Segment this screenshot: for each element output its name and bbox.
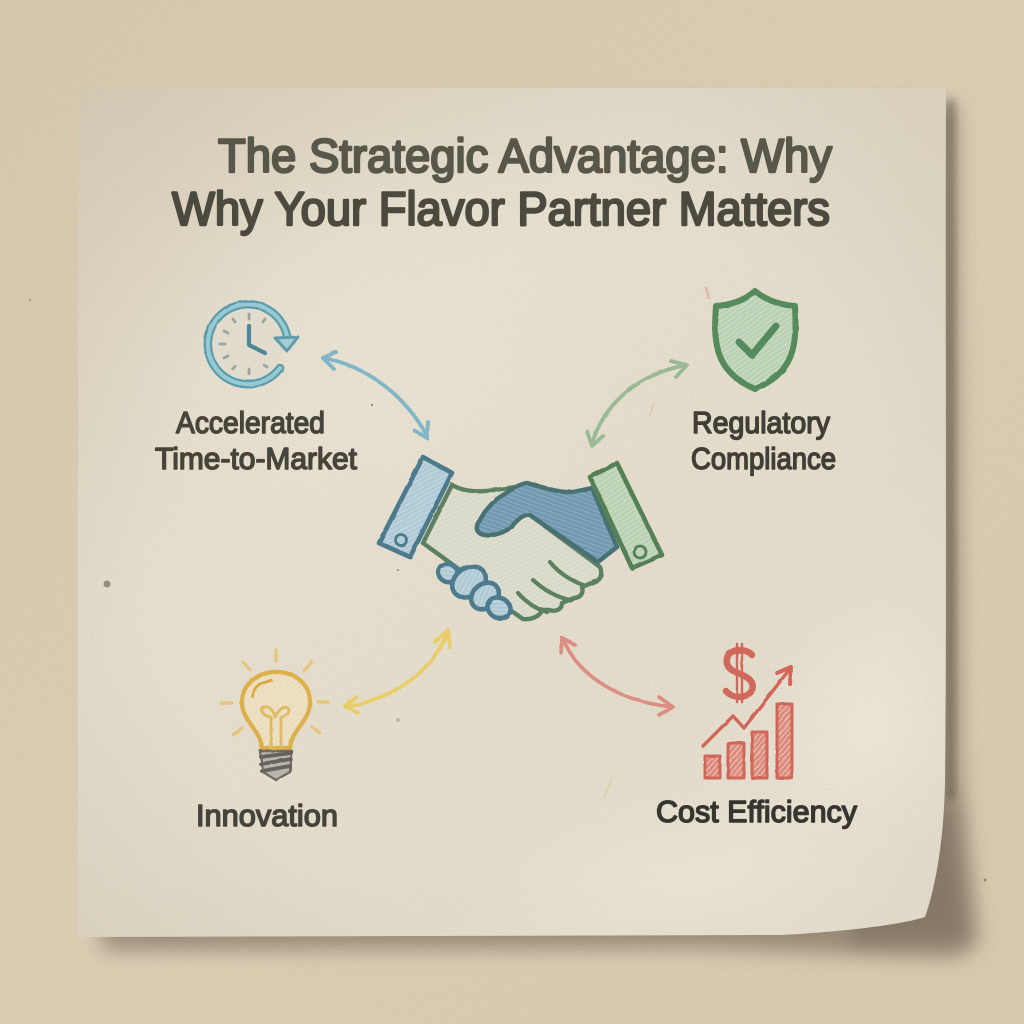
right cuff: [590, 463, 662, 568]
title: [172, 129, 832, 235]
icon: clock with circular arrow: [208, 304, 298, 384]
blue fingers: [435, 560, 514, 623]
icon: handshake: [379, 457, 662, 623]
bars: [705, 704, 792, 778]
label: Accelerated Time-to-Market: Accelerated: [176, 405, 325, 440]
arrow: handshake to cost: [561, 638, 673, 715]
label: Regulatory Compliance: Regulatory: [692, 405, 830, 440]
arrow: bulb to handshake: [345, 630, 450, 713]
page specks on background: [29, 299, 986, 881]
icon: light bulb: [221, 650, 328, 780]
pale left hand: [423, 485, 601, 619]
title line 2: Why Your Flavor Partner Matters: [172, 182, 830, 235]
trend arrow: [703, 670, 789, 746]
screw base: [260, 751, 292, 780]
label: Accelerated Time-to-Market: Time-to-Market: [155, 441, 357, 476]
panel: paper sheet: [78, 88, 946, 937]
filament: [262, 707, 289, 748]
title line 1: The Strategic Advantage: Why: [218, 129, 832, 182]
blue right hand: [477, 483, 617, 562]
rays: [221, 650, 328, 735]
label: Accelerated Time-to-Market: [155, 405, 357, 476]
label: Regulatory Compliance: [691, 405, 836, 476]
right cuff button: [634, 546, 646, 558]
check mark: [739, 326, 776, 355]
clock arrowhead: [275, 337, 298, 351]
label: Innovation: Innovation: [196, 798, 338, 833]
left cuff: [379, 457, 452, 557]
label: Cost Efficiency: Cost Efficiency: [656, 794, 857, 829]
dollar sign: [726, 644, 753, 702]
paper drop shadow: [102, 100, 978, 958]
clock ticks: [220, 314, 267, 374]
icon: shield with check: [715, 291, 796, 389]
left cuff button: [396, 534, 406, 546]
arrow: clock to handshake: [323, 352, 428, 438]
finger lines: [518, 562, 583, 612]
clock hands: [249, 326, 265, 353]
label: Regulatory Compliance: Compliance: [691, 441, 836, 476]
arrow: shield to handshake: [587, 361, 687, 446]
icon: dollar sign, bars and trend arrow: [703, 644, 792, 778]
glass highlight: [252, 680, 271, 696]
